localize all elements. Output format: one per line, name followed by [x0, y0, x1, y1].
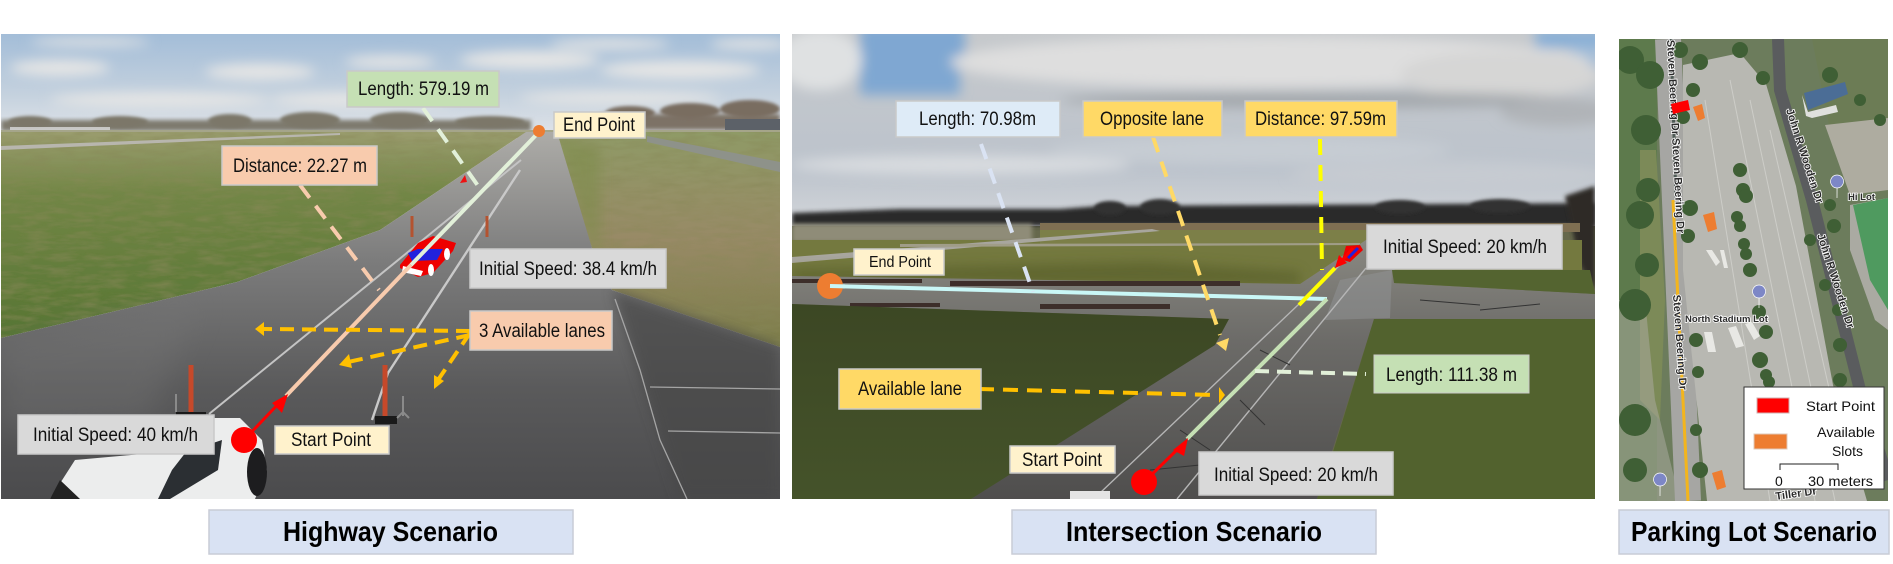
map legend — [1744, 387, 1884, 489]
label: lead vehicle initial speed: Initial Speed: 38.4 km/h — [479, 259, 657, 280]
label: end point: End Point — [563, 115, 636, 136]
label: start point: Start Point — [291, 430, 372, 451]
caption: intersection scenario: Intersection Scenario — [1066, 516, 1322, 547]
label: distance — [1245, 101, 1397, 137]
dashed leader: distance — [300, 185, 379, 290]
lane lines — [209, 160, 521, 414]
cross road — [792, 236, 1595, 499]
ego vehicle: white SUV — [50, 418, 267, 499]
label: end point — [854, 249, 944, 275]
label: length 70.98 — [896, 101, 1060, 137]
lower left grass — [792, 304, 1229, 499]
dashed leader: distance — [1320, 139, 1322, 270]
legend: start point: Start Point — [1806, 398, 1875, 414]
map labels — [1664, 40, 1876, 503]
end point marker — [533, 125, 545, 137]
label: oncoming initial speed: Initial Speed: 20 km/h — [1383, 237, 1547, 258]
athletic field — [1853, 198, 1888, 310]
caption: highway scenario — [209, 510, 573, 554]
arrows: available lanes — [255, 322, 470, 389]
map pins — [1654, 175, 1844, 496]
label: start point — [275, 426, 389, 454]
label: distance: Distance: 97.59m — [1255, 109, 1386, 130]
arrow: opposite lane — [1153, 137, 1229, 351]
label: ego initial speed — [18, 415, 214, 454]
label: ego initial speed: Initial Speed: 40 km/h — [33, 425, 198, 446]
label: ego initial speed — [1199, 452, 1393, 495]
dashed leader: length — [423, 108, 481, 190]
caption: intersection scenario — [1012, 510, 1376, 554]
label: length: Length: 579.19 m — [358, 79, 489, 100]
icon: red car — [400, 236, 456, 277]
photo: airfield runway — [1, 34, 790, 499]
trees — [1616, 42, 1886, 482]
caption: parking lot scenario — [1619, 510, 1889, 554]
steven beering road shoulder — [1668, 39, 1688, 501]
map labels: Steven Beering Dr — [1670, 294, 1689, 391]
label: opposite lane — [1083, 101, 1222, 137]
map labels: Hi Lot — [1848, 192, 1876, 203]
road: John R Wooden Dr — [1778, 39, 1888, 480]
scale bar: 0 — [1775, 473, 1783, 489]
label: length 111.38 — [1374, 355, 1529, 393]
panel: highway scenario — [1, 34, 790, 499]
fence — [647, 136, 780, 172]
right grass — [550, 132, 780, 347]
label: length — [347, 71, 499, 107]
label: start point: Start Point — [1022, 450, 1103, 471]
label: distance — [222, 146, 377, 185]
start point marker and arrow — [1131, 438, 1188, 495]
tree line — [792, 203, 1595, 226]
legend: available slots: Slots — [1832, 443, 1863, 459]
building — [1804, 82, 1848, 110]
start point marker and arrow — [231, 394, 288, 453]
left grass — [1, 132, 526, 338]
label: start point — [1010, 446, 1115, 473]
satellite map — [1616, 39, 1888, 503]
legend: available slots: Available — [1817, 424, 1875, 440]
icon: oncoming car and arrow — [1335, 245, 1363, 268]
end point marker — [817, 273, 845, 299]
label: distance: Distance: 22.27 m — [233, 156, 367, 177]
label: available lane: Available lane — [858, 379, 962, 400]
map labels: Tiller Dr — [1775, 485, 1818, 503]
upper right grass — [1392, 270, 1595, 294]
map labels: North Stadium Lot — [1685, 314, 1769, 325]
scale bar: 30 meters — [1808, 473, 1873, 489]
caption: highway scenario: Highway Scenario — [283, 516, 498, 547]
label: available lane — [839, 369, 981, 409]
label: opposite lane: Opposite lane — [1100, 109, 1204, 130]
label: end point: End Point — [869, 254, 931, 271]
parked equipment row — [792, 279, 1240, 309]
legend: available slots — [1754, 424, 1875, 459]
road: Steven Beering Dr — [1671, 39, 1676, 200]
dashed leader: length 70.98 — [981, 144, 1033, 292]
start point slot — [1671, 100, 1690, 114]
panel: parking lot scenario — [1616, 39, 1888, 503]
label: ego initial speed: Initial Speed: 20 km/h — [1214, 465, 1378, 486]
scale bar — [1775, 464, 1873, 489]
map labels: John R Wooden Dr — [1783, 107, 1825, 206]
tree lines — [1, 120, 531, 131]
dashed leader: length 111.38 — [1255, 371, 1366, 374]
available slots — [1693, 104, 1726, 490]
parking surface — [1683, 53, 1867, 501]
label: length 111.38: Length: 111.38 m — [1386, 365, 1517, 386]
map labels: John R Wooden Dr — [1814, 232, 1856, 331]
traffic cones — [176, 216, 487, 424]
arrow: available lane — [979, 387, 1225, 403]
label: available lanes — [470, 311, 612, 350]
road lines — [1100, 248, 1366, 499]
panel: intersection scenario — [778, 25, 1620, 499]
asphalt — [1, 132, 780, 499]
lower right grass — [1317, 319, 1595, 499]
trajectory line — [286, 132, 539, 396]
map labels: Steven Beering Dr Steven Beering Dr — [1664, 40, 1686, 234]
painted bays — [1704, 250, 1760, 352]
photo: airfield intersection — [778, 25, 1620, 499]
label: oncoming initial speed — [1367, 225, 1562, 269]
label: length 70.98: Length: 70.98m — [919, 109, 1036, 130]
trajectory lines — [830, 268, 1335, 439]
upper right lot and grounds — [1812, 39, 1888, 130]
label: lead vehicle initial speed — [470, 249, 666, 288]
label: available lanes: 3 Available lanes — [479, 321, 605, 342]
